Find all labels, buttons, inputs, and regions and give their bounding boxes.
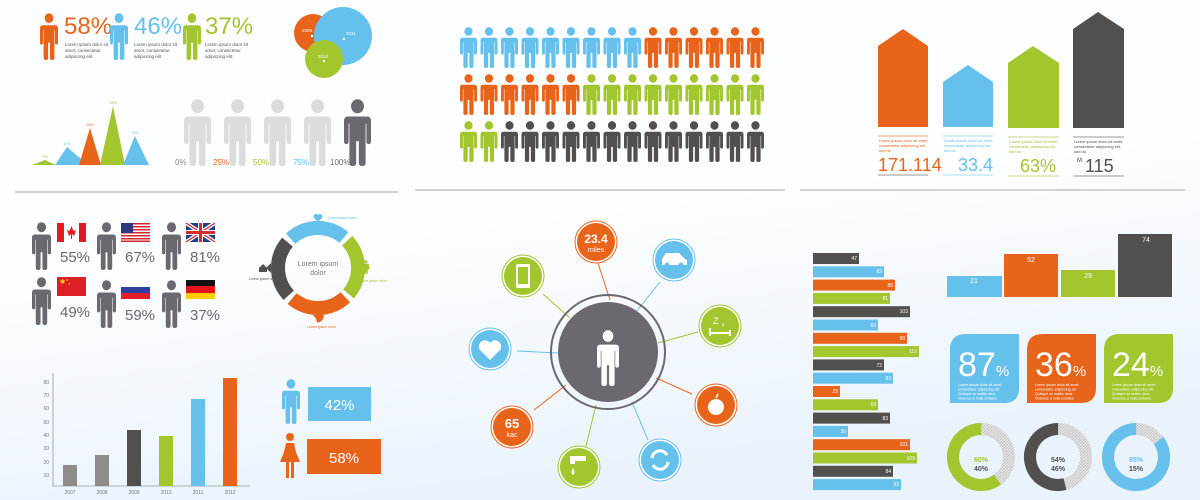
arrow bar chart: M [1077, 158, 1082, 164]
cycle diagram [249, 211, 388, 329]
panel: percentage persons: Lorem ipsum dolor sit [65, 42, 109, 47]
bar chart years: 70 [43, 393, 49, 399]
flag: china: ★ [59, 277, 66, 286]
triangle chart [32, 101, 149, 165]
icon: 65 kac [491, 406, 533, 448]
percentage cards: Quisque ac mattis risus. [1035, 392, 1073, 396]
venn circles [294, 7, 372, 78]
arrow bar chart: consectetur adipiscing elit, [1074, 144, 1121, 149]
cycle diagram: Lorem ipsum dolor [307, 325, 337, 329]
panel: percentage persons: Lorem ipsum dolor sit [205, 42, 249, 47]
horizontal bars: 83 [885, 376, 891, 382]
panel: country flags [32, 222, 220, 328]
icon: bed: z [722, 322, 725, 328]
bar chart years: 2011 [193, 490, 204, 496]
icon: car [653, 239, 695, 281]
donut charts: 46% [1051, 466, 1066, 473]
donut charts: 60% [974, 457, 989, 464]
fill-level persons: 25% [213, 158, 229, 167]
horizontal bars: 86 [887, 283, 893, 289]
percentage cards: 87% [958, 346, 1009, 384]
donut charts: 85% [1129, 457, 1144, 464]
horizontal bars: 62 [876, 269, 882, 275]
arrow bar chart: 63% [1020, 156, 1056, 176]
bar chart years: 2008 [96, 490, 108, 496]
flag: uk [186, 223, 215, 242]
horizontal bars: 72 [876, 363, 882, 369]
arrow bar chart: consectetur adipiscing elit, [1009, 144, 1056, 149]
panel: percentage persons: 58% [64, 13, 112, 40]
icon: apple [695, 384, 737, 426]
horizontal bars: 36 [840, 429, 846, 435]
percentage cards: Quisque ac mattis risus. [958, 392, 996, 396]
bar chart years [43, 373, 250, 496]
bar chart years: 20 [43, 460, 49, 466]
percentage cards: 24% [1112, 346, 1163, 384]
arrow bar chart [878, 12, 1124, 176]
arrow bar chart: 33.4 [958, 155, 993, 175]
arrow bar chart: Lorem ipsum dolor sit amet, [1074, 139, 1123, 144]
percentage cards: Vivamus a nulla sodales. [1112, 396, 1152, 400]
horizontal bars [813, 253, 919, 490]
percentage cards [950, 334, 1173, 403]
icon: 65 kac: 65 [505, 416, 519, 431]
arrow bar chart: Lorem ipsum dolor sit amet, [1009, 139, 1058, 144]
flag: china [57, 277, 86, 296]
bar chart years: 40 [43, 433, 49, 439]
horizontal bars: 83 [882, 416, 888, 422]
panel: country flags: 55% [60, 249, 90, 266]
venn circles: 2010 [318, 54, 329, 59]
panel: percentage persons: amet, consectetur [134, 48, 170, 53]
flag: usa [121, 223, 150, 242]
donut charts: 54% [1051, 457, 1066, 464]
horizontal bars: 93 [893, 482, 899, 488]
percentage cards: Lorem ipsum dolor sit amet, [1035, 383, 1079, 387]
icon: bed [699, 305, 741, 347]
percentage cards: consectetur adipiscing elit. [1035, 388, 1077, 392]
panel: percentage persons: adipiscing elit. [65, 54, 93, 59]
icon: miles: miles [588, 247, 605, 254]
icon: 65 kac: kac [507, 432, 518, 439]
panel: country flags: 81% [190, 249, 220, 266]
percentage cards: consectetur adipiscing elit. [958, 388, 1000, 392]
percentage cards: Lorem ipsum dolor sit amet, [958, 383, 1002, 387]
horizontal bars: 98 [899, 336, 905, 342]
column blocks: 52 [1027, 257, 1035, 264]
bar chart years: 60 [43, 406, 49, 412]
arrow bar chart: consectetur adipiscing elit, [879, 143, 926, 148]
horizontal bars: 112 [909, 349, 917, 355]
column blocks: 74 [1142, 237, 1150, 244]
arrow bar chart: Lorem ipsum dolor sit amet, [879, 138, 928, 143]
triangle chart: 12% [63, 142, 71, 146]
fill-level persons: 100% [330, 158, 350, 167]
icon: phone [502, 255, 544, 297]
fill-level persons: 75% [293, 158, 309, 167]
triangle chart: 15% [131, 131, 139, 135]
column blocks [947, 234, 1172, 297]
gender split: 58% [329, 450, 359, 467]
donut charts: 40% [974, 466, 989, 473]
horizontal bars: 69 [870, 402, 876, 408]
cycle diagram: Lorem ipsum dolor [328, 216, 358, 220]
panel: country flags: 49% [60, 304, 90, 321]
donut charts: 15% [1129, 466, 1144, 473]
fill-level persons: 0% [175, 158, 187, 167]
bar chart years: 2010 [160, 490, 172, 496]
panel: country flags: 59% [125, 307, 155, 324]
panel: percentage persons: amet, consectetur [205, 48, 241, 53]
panel: country flags: 37% [190, 307, 220, 324]
fill-level persons: 50% [253, 158, 269, 167]
arrow bar chart: sed do [944, 148, 957, 153]
percentage cards: Vivamus a nulla sodales. [1035, 396, 1075, 400]
flag: canada [57, 223, 86, 242]
horizontal bars: 29 [832, 389, 838, 395]
horizontal bars: 101 [900, 442, 908, 448]
hub diagram [469, 221, 741, 488]
cycle diagram: Lorem ipsum [298, 261, 338, 268]
percentage cards: 36% [1035, 346, 1086, 384]
triangle chart: 20% [86, 123, 94, 127]
cycle diagram: dolor [310, 270, 326, 277]
cycle diagram: Lorem ipsum dolor [249, 277, 279, 281]
panel: percentage persons: 46% [134, 13, 182, 40]
arrow bar chart: consectetur adipiscing elit, [944, 143, 991, 148]
bar chart years: 10 [43, 473, 49, 479]
triangle chart: 4% [42, 155, 48, 159]
icon: heart [469, 328, 511, 370]
column blocks: 29 [1084, 273, 1092, 280]
panel: percentage persons: adipiscing elit. [134, 54, 162, 59]
arrow bar chart: sed do [1009, 149, 1022, 154]
horizontal bars: 47 [851, 256, 857, 262]
panel: percentage persons: Lorem ipsum dolor sit [134, 42, 178, 47]
flag: china: ★ [68, 282, 71, 286]
bar chart years: 2009 [128, 490, 140, 496]
column blocks: 21 [970, 278, 978, 285]
bar chart years: 2012 [224, 490, 236, 496]
horizontal bars: 84 [885, 469, 891, 475]
bar chart years: 30 [43, 446, 49, 452]
panel: percentage persons: 37% [205, 13, 253, 40]
arrow bar chart: sed do [879, 148, 892, 153]
icon: refresh [639, 439, 681, 481]
flag: china: ★ [66, 278, 69, 282]
flag: russia [121, 281, 150, 299]
percentage cards: Quisque ac mattis risus. [1112, 392, 1150, 396]
cycle diagram: Lorem ipsum dolor [358, 279, 388, 283]
panel: percentage persons: adipiscing elit. [205, 54, 233, 59]
icon: bed: Z [713, 316, 719, 326]
percentage cards: consectetur adipiscing elit. [1112, 388, 1154, 392]
percentage cards: Vivamus a nulla sodales. [958, 396, 998, 400]
horizontal bars: 69 [870, 323, 876, 329]
triangle chart: 34% [109, 101, 117, 105]
bar chart years: 50 [43, 420, 49, 426]
icon: miles [575, 221, 617, 263]
flag: germany [186, 280, 215, 299]
bar chart years: 80 [43, 380, 49, 386]
arrow bar chart: sed do [1074, 149, 1087, 154]
bar chart years: 2007 [64, 490, 76, 496]
fill-level persons [175, 99, 371, 167]
panel: percentage persons: amet, consectetur [65, 48, 101, 53]
horizontal bars: 103 [900, 309, 908, 315]
horizontal bars: 109 [907, 456, 915, 462]
donut charts [942, 418, 1175, 496]
horizontal bars: 81 [882, 296, 888, 302]
panel: percentage persons [40, 13, 253, 60]
arrow bar chart: 115 [1085, 156, 1114, 176]
icon: tap [558, 446, 600, 488]
venn circles: 2009 [302, 28, 313, 33]
panel: country flags: 67% [125, 249, 155, 266]
arrow bar chart: Lorem ipsum dolor sit amet, [944, 138, 993, 143]
venn circles: 2011 [346, 31, 356, 36]
icon: miles: 23.4 [584, 232, 608, 246]
people grid [460, 27, 764, 162]
gender split: 42% [324, 397, 355, 414]
gender split [280, 379, 381, 478]
percentage cards: Lorem ipsum dolor sit amet, [1112, 383, 1156, 387]
arrow bar chart: 171.114 [878, 155, 942, 175]
